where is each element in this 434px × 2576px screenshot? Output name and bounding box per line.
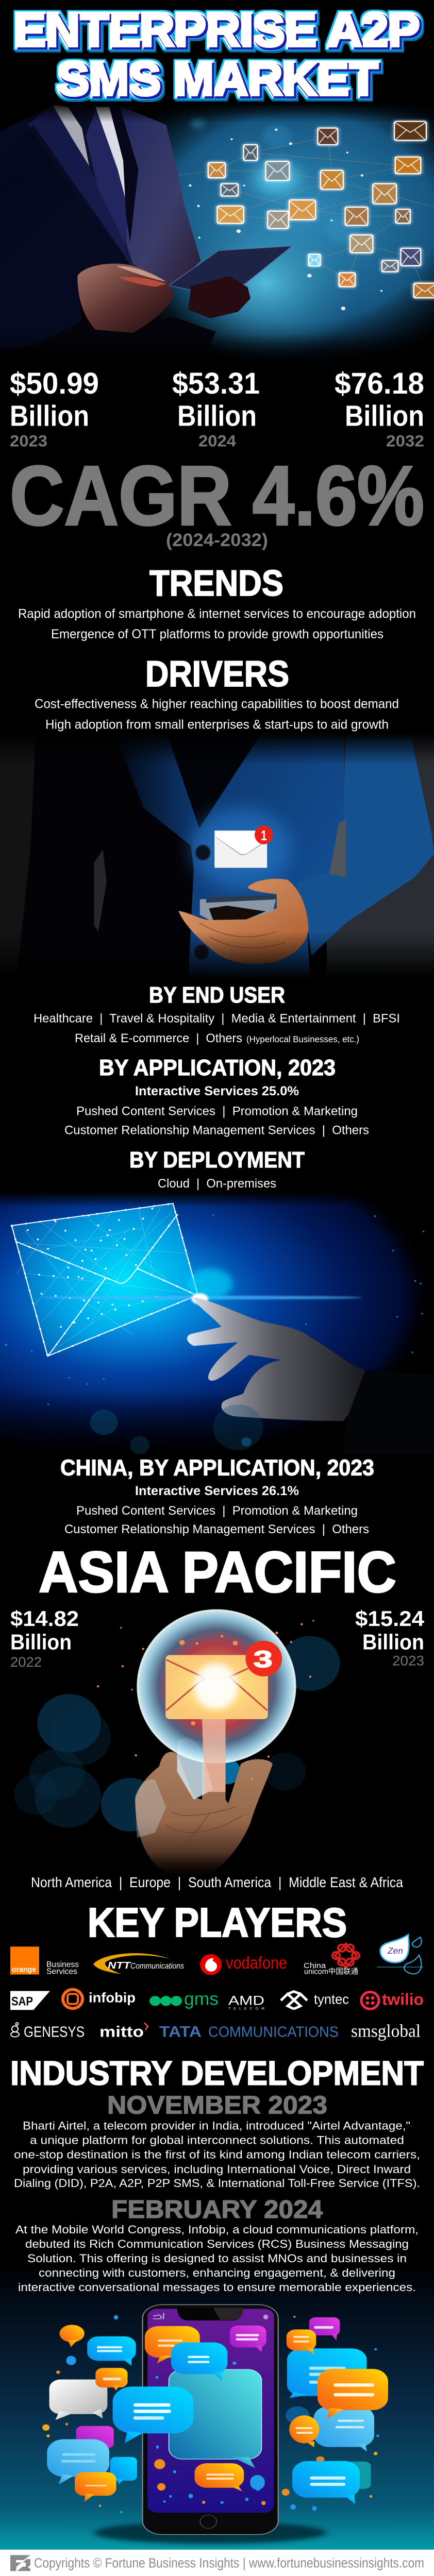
China application list line 2: Customer Relationship Management Services | Others [64,1522,369,1536]
year: 2023 [392,1653,424,1668]
drivers heading: DRIVERS [145,654,289,694]
application heading: BY APPLICATION, 2023 [99,1056,336,1080]
logo: Zen [377,1935,423,1974]
logo: gms [149,1989,219,2009]
network glow background [89,58,434,379]
phone [143,2304,278,2534]
message envelope [165,1655,268,1719]
logo: NTT Communications: NTT [108,1960,131,1971]
tablet [169,246,292,291]
illustration: phone with chat bubbles [0,2277,434,2550]
Asia Pacific 2023 value [355,1606,424,1668]
logo: SAP: SAP [11,1995,33,2008]
glowing finger [202,1718,226,1792]
logo: SAP [10,1991,50,2010]
end user list line 2: (Hyperlocal Businesses, etc.) [246,1034,359,1044]
logo: AMD Telecom: TELECOM [228,2007,264,2010]
trend 2: Emergence of OTT platforms to provide growth opportunities [51,627,383,641]
envelope [12,1204,198,1356]
network lines [172,137,434,291]
February 2024 date: FEBRUARY 2024 [111,2195,323,2224]
light flare [42,1268,362,1304]
logo: China Unicom: unicom中国联通 [304,1968,358,1976]
deployment heading: BY DEPLOYMENT [129,1148,305,1173]
backdrop [0,731,434,980]
jacket [113,731,434,980]
year: 2023 [10,432,47,450]
logo: Zen: Zen [387,1946,403,1956]
logo: China Unicom [304,1944,359,1976]
value: $14.82 [10,1606,79,1631]
star dots [5,1214,424,1405]
November 2023 paragraph: one-stop destination is the first of its kind among Indian telecom carriers, [14,2148,420,2161]
China application heading: CHINA, BY APPLICATION, 2023 [60,1455,374,1480]
title line 2: SMS MARKET [58,53,378,106]
logo: Tata Communications: TATA [159,2023,202,2040]
unit: Billion [10,1630,72,1654]
February 2024 paragraph: debuted its Rich Communication Services (RCS) Business Messaging [25,2238,409,2250]
deployment list: Cloud | On-premises [158,1177,276,1191]
value: $76.18 [335,367,424,400]
November 2023 paragraph: Dialing (DID), P2A, A2P, P2P SMS, & International Toll-Free Service (ITFS). [14,2177,420,2190]
year: 2024 [198,432,236,450]
February 2024 paragraph: interactive conversational messages to ensure memorable experiences. [18,2281,416,2294]
logo: NTT Communications [93,1953,184,1974]
logo: Vodafone: vodafone [226,1954,287,1973]
pointing hand [187,1298,365,1421]
logo: tyntec: tyntec [314,1991,349,2007]
title [14,4,420,106]
confetti dots [42,2315,379,2513]
logo: Orange Business Services: Business [46,1960,79,1969]
illustration: glowing network envelope and pointing hand [0,1192,434,1454]
illustration: man in blue jacket with phone and message [0,733,434,978]
unit: Billion [345,400,424,433]
end user list line 2 [75,1032,359,1045]
right bubbles [286,2317,388,2504]
logo: Genesys: GENESYS [24,2024,85,2040]
logo: tyntec [281,1991,349,2009]
blue glow [0,1123,434,1469]
illustration: hand touching message bubble [11,1609,422,2029]
notification badge [255,825,273,844]
logo: Tata Communications [159,2023,339,2040]
end user list line 2: Retail & E-commerce | Others [75,1032,242,1045]
CAGR period: (2024-2032) [166,530,268,550]
application list line 1: Pushed Content Services | Promotion & Marketing [76,1105,358,1118]
February 2024 paragraph: At the Mobile World Congress, Infobip, a cloud communications platform, [15,2223,419,2236]
end user list line 1: Healthcare | Travel & Hospitality | Media & Entertainment | BFSI [34,1012,400,1025]
November 2023 paragraph [14,2120,420,2190]
key players heading: KEY PLAYERS [88,1900,347,1946]
logo: Twilio: twilio [382,1990,424,2008]
year: 2032 [386,432,424,450]
application list line 2: Customer Relationship Management Services | Others [64,1124,369,1137]
hand [135,1718,273,1876]
logo: Tata Communications: COMMUNICATIONS [208,2024,339,2040]
February 2024 paragraph [15,2223,419,2294]
hands [77,264,251,333]
Asia Pacific 2022 value [10,1606,79,1670]
footer bar [0,2550,434,2576]
China application list line 1: Pushed Content Services | Promotion & Marketing [76,1504,358,1518]
value: $15.24 [355,1606,424,1631]
bokeh [90,1404,263,1454]
China leading application share: Interactive Services 26.1% [135,1484,299,1498]
logo: Orange Business Services: orange [12,1966,36,1974]
logo: Orange Business Services: Services [46,1968,77,1976]
logo: Vodafone [200,1954,287,1975]
logo: Orange Business Services [10,1946,79,1976]
unit: Billion [177,400,257,433]
market size 2032 [335,367,424,450]
driver 1: Cost-effectiveness & higher reaching capabilities to boost demand [35,697,399,711]
logo: China Unicom: China [304,1962,326,1970]
hand holding phone [178,879,309,964]
Asia Pacific heading: ASIA PACIFIC [39,1540,396,1605]
February 2024 paragraph: connecting with customers, enhancing engagement, & delivering [39,2266,395,2279]
end user heading: BY END USER [149,982,285,1008]
logo: infobip [63,1990,136,2008]
logo: smsglobal: smsglobal [351,2021,421,2041]
market size 2023 [10,367,99,450]
suit jacket [0,105,216,365]
bubble sphere [138,1610,295,1762]
November 2023 paragraph: a unique platform for global interconnect solutions. This automated [30,2134,404,2147]
February 2024 paragraph: Solution. This offering is designed to assist MNOs and businesses in [27,2252,407,2265]
value: $50.99 [10,367,99,400]
top and bottom fades [0,102,434,364]
logo: NTT Communications: Communications [130,1962,184,1971]
background gradient [0,2264,434,2550]
fade at wrist [111,1853,277,1878]
top and bottom fades [0,733,434,979]
unit: Billion [10,400,89,433]
floor shadow [94,2521,327,2544]
logo: AMD Telecom: AMD [228,1994,264,2008]
footer logo [10,2555,30,2571]
leading application share: Interactive Services 25.0% [135,1084,299,1098]
logo: gms: gms [184,1989,219,2009]
market size 2024 [172,367,260,450]
bokeh circles [14,1636,340,1832]
logo: Genesys [11,2023,85,2040]
left bubbles behind phone [47,2325,137,2502]
November 2023 paragraph: providing various services, including International Voice, Direct Inward [23,2163,411,2176]
notification badge: 1 [261,827,267,843]
jacket buttons [194,845,210,959]
value: $53.31 [172,367,260,400]
year: 2022 [10,1654,42,1670]
logo: infobip: infobip [89,1990,136,2006]
hero illustration: businessman with tablet and email network [0,104,434,357]
November 2023 date: NOVEMBER 2023 [107,2091,327,2119]
November 2023 paragraph: Bharti Airtel, a telecom provider in India, introduced "Airtel Advantage," [23,2120,410,2132]
notification badge: 3 [253,1647,273,1673]
sparkle dots [189,128,382,310]
logo: Twilio [361,1990,424,2009]
title line 1: ENTERPRISE A2P [14,4,420,57]
trends heading: TRENDS [149,563,283,604]
sleeve [343,1370,434,1454]
driver 2: High adoption from small enterprises & start-ups to aid growth [45,718,389,732]
notification badge [245,1641,282,1676]
unit: Billion [362,1630,424,1654]
logo: mitto: mitto [99,2023,144,2040]
sparks [97,1620,314,1780]
bubbles on phone screen [113,2326,266,2492]
floating envelopes [208,122,434,298]
white message envelope [214,831,267,868]
